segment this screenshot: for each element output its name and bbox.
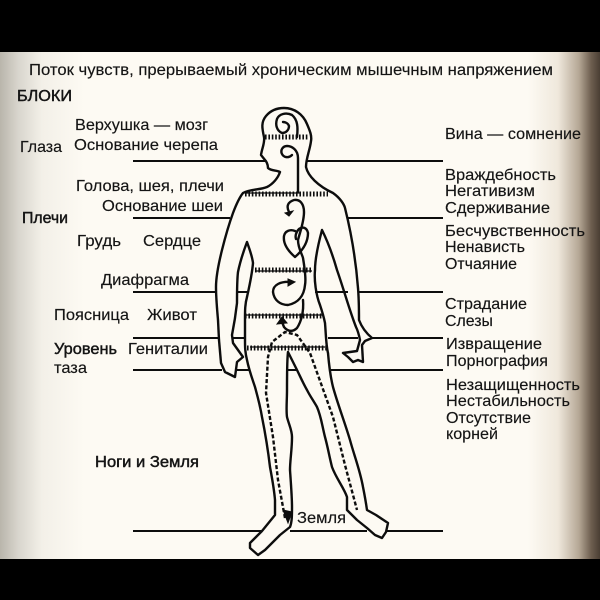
left column labels: таза — [54, 360, 87, 377]
earth label: Земля — [297, 510, 346, 527]
dashed energy lines through the legs — [266, 332, 357, 518]
right column labels: Отчаяние — [445, 256, 517, 273]
heart — [284, 228, 308, 257]
left column labels: Диафрагма — [101, 272, 189, 289]
heading: blocks: БЛОКИ — [17, 88, 72, 105]
left column labels: Гениталии — [128, 341, 208, 358]
right column labels: Сдерживание — [445, 200, 550, 217]
body outline — [216, 108, 388, 555]
right column labels: Слезы — [445, 313, 493, 330]
left column labels: Ноги и Земля — [95, 454, 199, 471]
spiral in head — [276, 114, 297, 137]
left column labels: Живот — [147, 307, 198, 324]
arrowheads — [277, 211, 295, 523]
block: diaphragm — [255, 270, 312, 271]
left column labels: Поясница — [54, 307, 129, 324]
title: Поток чувств, прерываемый хроническим мышечным напряжением — [29, 62, 553, 79]
block: skull base — [265, 134, 308, 140]
right column labels: Вина — сомнение — [445, 126, 581, 143]
right column labels: Нестабильность — [446, 393, 570, 410]
right column labels: Извращение — [446, 336, 542, 353]
right column labels — [445, 126, 585, 443]
block: shoulders — [245, 193, 328, 194]
left column labels: Основание шеи — [102, 198, 223, 215]
block: hips — [245, 315, 322, 316]
right column labels: Бесчувственность — [445, 223, 585, 240]
right column labels: Отсутствие — [446, 410, 531, 427]
left column labels — [20, 117, 224, 471]
left column labels: Верхушка — мозг — [75, 117, 208, 134]
left column labels: Уровень — [54, 341, 117, 358]
right column labels: корней — [446, 426, 498, 443]
lower flow line with arrow — [282, 300, 303, 331]
right column labels: Ненависть — [445, 239, 525, 256]
left column labels: Голова, шея, плечи — [76, 178, 224, 195]
level divider lines — [133, 161, 443, 531]
body figure — [216, 108, 388, 555]
left column labels: Плечи — [22, 210, 68, 227]
chest, heart and belly flow line — [273, 200, 305, 305]
right column labels: Незащищенность — [446, 377, 580, 394]
right column labels: Страдание — [445, 296, 527, 313]
left column labels: Грудь — [77, 233, 121, 250]
left column labels: Сердце — [143, 233, 201, 250]
neck spiral with arrow — [281, 146, 298, 192]
block: genitals — [247, 347, 328, 348]
left column labels: Основание черепа — [74, 137, 218, 154]
right column labels: Негативизм — [445, 183, 535, 200]
right column labels: Порнография — [446, 353, 548, 370]
right column labels: Враждебность — [445, 167, 556, 184]
left column labels: Глаза — [20, 139, 62, 156]
